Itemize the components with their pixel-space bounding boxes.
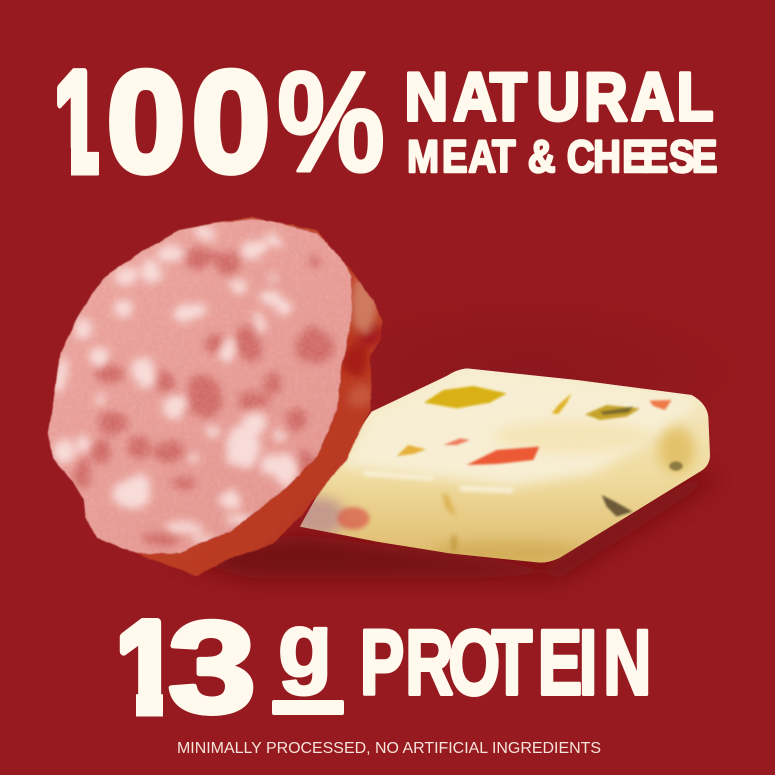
fat spots [53,227,297,543]
title: 100%: 0 [107,43,185,202]
heading: protein: PROTEIN [360,610,651,714]
stat: 13: 1 [116,594,178,740]
heading: natural: NATURAL [405,58,713,135]
stat unit: g with underline: g [278,596,332,696]
pepper flecks [397,386,683,517]
title: 100%: 1 [54,43,100,202]
stat unit: g with underline [272,596,344,715]
title: 100%: % [277,43,385,202]
footnote: MINIMALLY PROCESSED, NO ARTIFICIAL INGREDIENTS [177,740,601,757]
title: 100% [57,68,384,176]
backdrop shadow [170,290,770,578]
photo: salami slice [40,210,390,580]
stat: 13: 3 [168,594,256,740]
stat: 13 [120,618,254,716]
heading: meat and cheese: MEAT & CHEESE [407,131,717,182]
title: 100%: 0 [192,43,270,202]
photo: cheese slice [300,368,710,563]
dark meat mottling [75,247,332,545]
